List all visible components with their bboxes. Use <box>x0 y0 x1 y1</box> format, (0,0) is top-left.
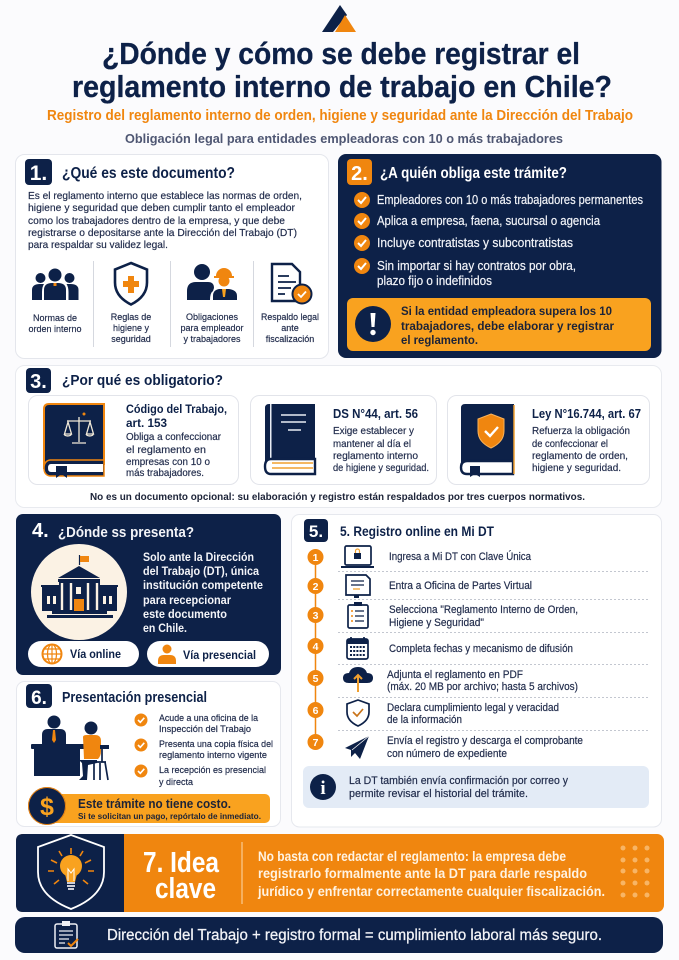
text: código del trabajo <box>126 402 227 479</box>
pill: vía online <box>28 641 139 667</box>
check list presencial: Inspección del Trabajo <box>159 724 251 734</box>
panel: 1 qué es este documento <box>16 154 328 358</box>
description text: para respaldar su validez legal. <box>28 239 168 251</box>
text: ds 44: DS N°44, art. 56 <box>333 407 418 421</box>
badge 1: 1. <box>30 162 47 185</box>
caption: reglas: higiene y <box>113 323 150 333</box>
check list <box>354 192 643 288</box>
pill: vía presencial <box>147 641 269 667</box>
info note: i <box>320 778 326 799</box>
secondary subtitle: Obligación legal para entidades empleadoras con 10 o más trabajadores <box>125 131 563 146</box>
icon: document monitor <box>346 575 370 598</box>
caption: normas: Normas de <box>33 313 77 323</box>
step texts: Ingresa a Mi DT con Clave Única <box>389 550 531 563</box>
description <box>143 552 263 635</box>
badge 5 <box>304 519 328 542</box>
text: ley 16744: higiene y seguridad. <box>532 462 621 474</box>
timeline steps: 1 <box>313 552 319 564</box>
description: del Trabajo (DT), única <box>143 566 260 578</box>
callout: sin costo: $ <box>40 793 54 821</box>
icon: calendar <box>347 637 368 659</box>
panel: 6 presentación presencial <box>16 682 280 826</box>
caption: reglas: seguridad <box>111 334 151 344</box>
caption: obligaciones: Obligaciones <box>186 312 239 322</box>
check list presencial: y directa <box>159 777 193 787</box>
caption: obligaciones: para empleador <box>180 323 244 333</box>
badge 3 <box>26 368 51 393</box>
timeline steps <box>308 549 324 750</box>
pill: vía online: Vía online <box>70 649 121 661</box>
callout: sin costo: Si te solicitan un pago, repórtalo de inmediato. <box>78 811 261 821</box>
caption: respaldo <box>261 312 319 344</box>
heading 4: ¿Dónde ss presenta? <box>58 524 194 541</box>
callout: sin costo: Este trámite no tiene costo. <box>78 797 231 811</box>
text: código del trabajo: empresas con 10 o <box>126 456 210 468</box>
icon: clipboard check <box>55 921 78 948</box>
description text: Es el reglamento interno que establece las normas de orden, <box>28 190 302 202</box>
text: ds 44 <box>333 407 429 474</box>
icon: shield check <box>347 700 369 726</box>
description: institución competente <box>143 580 263 592</box>
heading 5: 5. Registro online en Mi DT <box>340 524 495 539</box>
step texts: Higiene y Seguridad" <box>389 617 484 629</box>
timeline steps: 5 <box>313 673 319 685</box>
step texts: de la información <box>387 714 462 726</box>
text: código del trabajo: más trabajadores. <box>126 467 204 479</box>
text: ley 16744: de confeccionar el <box>532 438 608 450</box>
heading 7: clave <box>155 873 216 905</box>
icon: document with check <box>272 264 312 304</box>
check list presencial: La recepción es presencial <box>159 765 266 775</box>
icon: laptop lock <box>341 546 374 568</box>
text: ley 16744: reglamento de orden, <box>532 450 628 462</box>
step texts: Entra a Oficina de Partes Virtual <box>389 580 532 592</box>
info note: La DT también envía confirmación por correo y <box>349 775 569 787</box>
check list presencial <box>134 713 273 787</box>
description: para recepcionar <box>143 595 231 607</box>
caption: respaldo: Respaldo legal <box>261 312 319 322</box>
badge 6 <box>26 684 52 709</box>
badge 6: 6. <box>31 688 47 709</box>
subtitle: Registro del reglamento interno de orden, higiene y seguridad ante la Dirección del Trabajo <box>47 108 633 124</box>
badge 2: 2. <box>351 163 368 185</box>
description: este documento <box>143 609 227 621</box>
description text <box>28 190 302 251</box>
info note <box>303 766 649 808</box>
text: ds 44: de higiene y seguridad. <box>333 462 429 474</box>
step texts: Completa fechas y mecanismo de difusión <box>389 643 573 655</box>
description text: higiene y seguridad que deben cumplir tanto el empleador <box>28 202 295 214</box>
icon: employer and worker <box>187 264 237 300</box>
text: ds 44: Exige establecer y <box>333 425 415 437</box>
conclusion text: No es un documento opcional: su elaboración y registro están respaldados por tres cuerpos normativos. <box>90 491 585 503</box>
caption: obligaciones: y trabajadores <box>183 334 241 344</box>
badge 3: 3. <box>30 371 47 393</box>
key idea text: jurídico y enfrentar correctamente cualquier fiscalización. <box>257 883 605 899</box>
description: en Chile. <box>143 623 187 635</box>
description text: registrarse o depositarse ante la Dirección del Trabajo (DT) <box>28 227 297 239</box>
callout: obligation <box>347 298 651 351</box>
icon: shield with light bulb <box>38 835 104 909</box>
caption: normas <box>28 313 82 334</box>
heading 2: ¿A quién obliga este trámite? <box>380 165 567 182</box>
timeline steps: 7 <box>313 737 319 749</box>
text: ds 44: mantener al día el <box>333 438 411 450</box>
illustration: attention desk <box>31 716 109 780</box>
pill: vía presencial: Vía presencial <box>183 650 256 662</box>
icon: shield with cross <box>115 263 147 304</box>
card: código del trabajo <box>28 396 238 484</box>
timeline steps: 3 <box>313 610 319 622</box>
icon: book with scales <box>44 404 104 478</box>
key idea text: registrarlo formalmente ante la DT para darle respaldo <box>258 865 587 881</box>
panel: 2 a quién obliga <box>338 154 662 358</box>
description: Solo ante la Dirección <box>143 552 254 564</box>
info note: permite revisar el historial del trámite. <box>349 788 528 800</box>
title: ¿Dónde y cómo se debe registrar el <box>102 36 580 71</box>
icon: book with shield <box>461 404 514 477</box>
logo <box>322 5 356 32</box>
caption: respaldo: fiscalización <box>266 334 314 344</box>
number 4: 4. <box>32 520 49 542</box>
callout: sin costo <box>28 787 270 825</box>
badge 1 <box>25 159 52 185</box>
step texts: Adjunta el reglamento en PDF <box>387 669 524 681</box>
card: ley 16744 <box>448 396 650 484</box>
step texts: (máx. 20 MB por archivo; hasta 5 archivos) <box>387 681 578 693</box>
footer text: Dirección del Trabajo + registro formal = cumplimiento laboral más seguro. <box>107 927 602 944</box>
heading 6: Presentación presencial <box>62 689 207 706</box>
caption: normas: orden interno <box>28 324 82 334</box>
caption: respaldo: ante <box>281 323 299 333</box>
panel: 3 por qué es obligatorio <box>16 366 662 508</box>
icon: cloud upload <box>343 667 373 692</box>
step texts <box>387 550 583 760</box>
callout: obligation: Si la entidad empleadora supera los 10 <box>401 304 612 318</box>
text: código del trabajo: Obliga a confeccionar <box>126 431 221 443</box>
step texts: Envía el registro y descarga el comprobante <box>387 735 583 747</box>
title: reglamento interno de trabajo en Chile? <box>72 69 612 104</box>
text: código del trabajo: Código del Trabajo, <box>126 402 227 416</box>
timeline steps: 2 <box>313 581 319 593</box>
step texts: con número de expediente <box>387 748 507 760</box>
heading 1: ¿Qué es este documento? <box>62 165 235 182</box>
title <box>72 36 612 104</box>
step texts: Declara cumplimiento legal y veracidad <box>387 702 559 714</box>
text: código del trabajo: art. 153 <box>126 416 167 430</box>
check list: Sin importar si hay contratos por obra, <box>377 259 576 273</box>
check list presencial: Presenta una copia física del <box>159 739 273 749</box>
card: ds 44 <box>250 396 436 484</box>
heading 3: ¿Por qué es obligatorio? <box>62 372 223 389</box>
key idea text <box>257 848 605 899</box>
check list: Incluye contratistas y subcontratistas <box>377 236 573 250</box>
description text: como los trabajadores dentro de la empresa, y que debe <box>28 215 285 227</box>
heading 7 <box>143 847 220 905</box>
timeline steps: 6 <box>313 705 319 717</box>
text: código del trabajo: el reglamento en <box>126 444 206 456</box>
check list: Aplica a empresa, faena, sucursal o agencia <box>377 214 600 228</box>
check list: plazo fijo o indefinidos <box>377 274 492 288</box>
caption: obligaciones <box>180 312 244 344</box>
step texts: Selecciona "Reglamento Interno de Orden, <box>389 604 578 616</box>
caption: reglas: Reglas de <box>111 312 151 322</box>
icon: government building <box>31 544 127 640</box>
footer bar <box>15 917 663 953</box>
check list: Empleadores con 10 o más trabajadores permanentes <box>377 193 643 207</box>
icon: book with lines <box>265 404 315 474</box>
icon: clipboard <box>348 602 368 628</box>
callout: obligation: trabajadores, debe elaborar y registrar <box>401 319 614 333</box>
badge 2 <box>347 159 372 185</box>
text: ley 16744: Ley N°16.744, art. 67 <box>532 407 641 421</box>
check list presencial: Acude a una oficina de la <box>159 713 258 723</box>
text: ley 16744: Refuerza la obligación <box>532 425 630 437</box>
text: ds 44: reglamento interno <box>333 450 418 462</box>
key idea text: No basta con redactar el reglamento: la empresa debe <box>258 848 566 864</box>
check list presencial: reglamento interno vigente <box>159 750 267 760</box>
callout: obligation: el reglamento. <box>401 333 478 347</box>
heading 7: 7. Idea <box>143 847 220 879</box>
panel: 7 idea clave <box>16 834 664 912</box>
timeline steps: 4 <box>313 641 319 653</box>
icon: paper plane <box>345 736 369 759</box>
icon: people <box>32 268 78 300</box>
badge 5: 5. <box>309 522 323 541</box>
text: ley 16744 <box>532 407 641 474</box>
panel: 5 registro online <box>292 514 662 827</box>
caption: reglas <box>111 312 151 344</box>
panel: 4 dónde se presenta <box>16 514 281 675</box>
